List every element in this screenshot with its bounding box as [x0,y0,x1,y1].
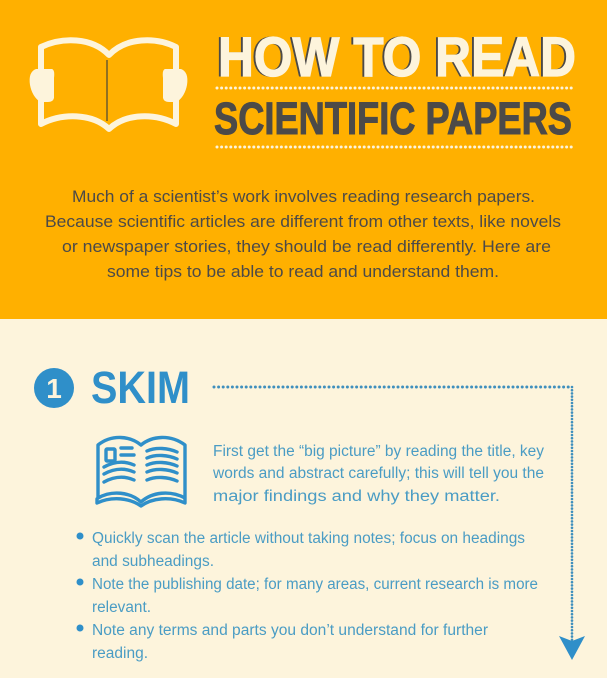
bullet three [76,622,488,662]
bullet three: reading. [92,645,148,662]
divider dots [217,86,575,90]
icon: open book [97,437,185,506]
panel: cream section [0,319,607,678]
icon: number 1 badge [34,368,74,408]
icon: open book held by hands [30,40,187,129]
bullet three: Note any terms and parts you don’t understand for further [92,622,488,639]
text block: skim summary: major findings and why they matter. [213,488,500,505]
text block: skim summary [212,443,544,505]
text block: introduction: Because scientific articles are different from other texts, like novels [45,212,561,231]
panel: orange header [0,0,607,319]
list: skim tips [76,530,538,662]
text block: introduction: some tips to be able to read and understand them. [107,262,499,281]
text block: introduction [45,187,561,281]
text block: skim summary: First get the “big picture” by reading the title, key [213,443,544,460]
arrow: dotted path with arrowhead [214,387,585,660]
text block: introduction: Much of a scientist’s work involves reading research papers. [72,187,535,206]
bullet one: Quickly scan the article without taking notes; focus on headings [92,530,525,547]
text block: introduction: or newspaper stories, they should be read differently. Here are [62,237,551,256]
divider dots [217,146,575,148]
bullet one: and subheadings. [92,553,214,570]
bullet one [76,530,525,570]
heading: skim: SKIM [91,362,190,413]
bullet two: relevant. [92,599,151,616]
bullet two: Note the publishing date; for many areas, current research is more [92,576,538,593]
text block: skim summary: words and abstract carefully; this will tell you the [212,465,544,482]
icon: number 1 badge: 1 [46,373,62,404]
bullet two [76,576,538,616]
